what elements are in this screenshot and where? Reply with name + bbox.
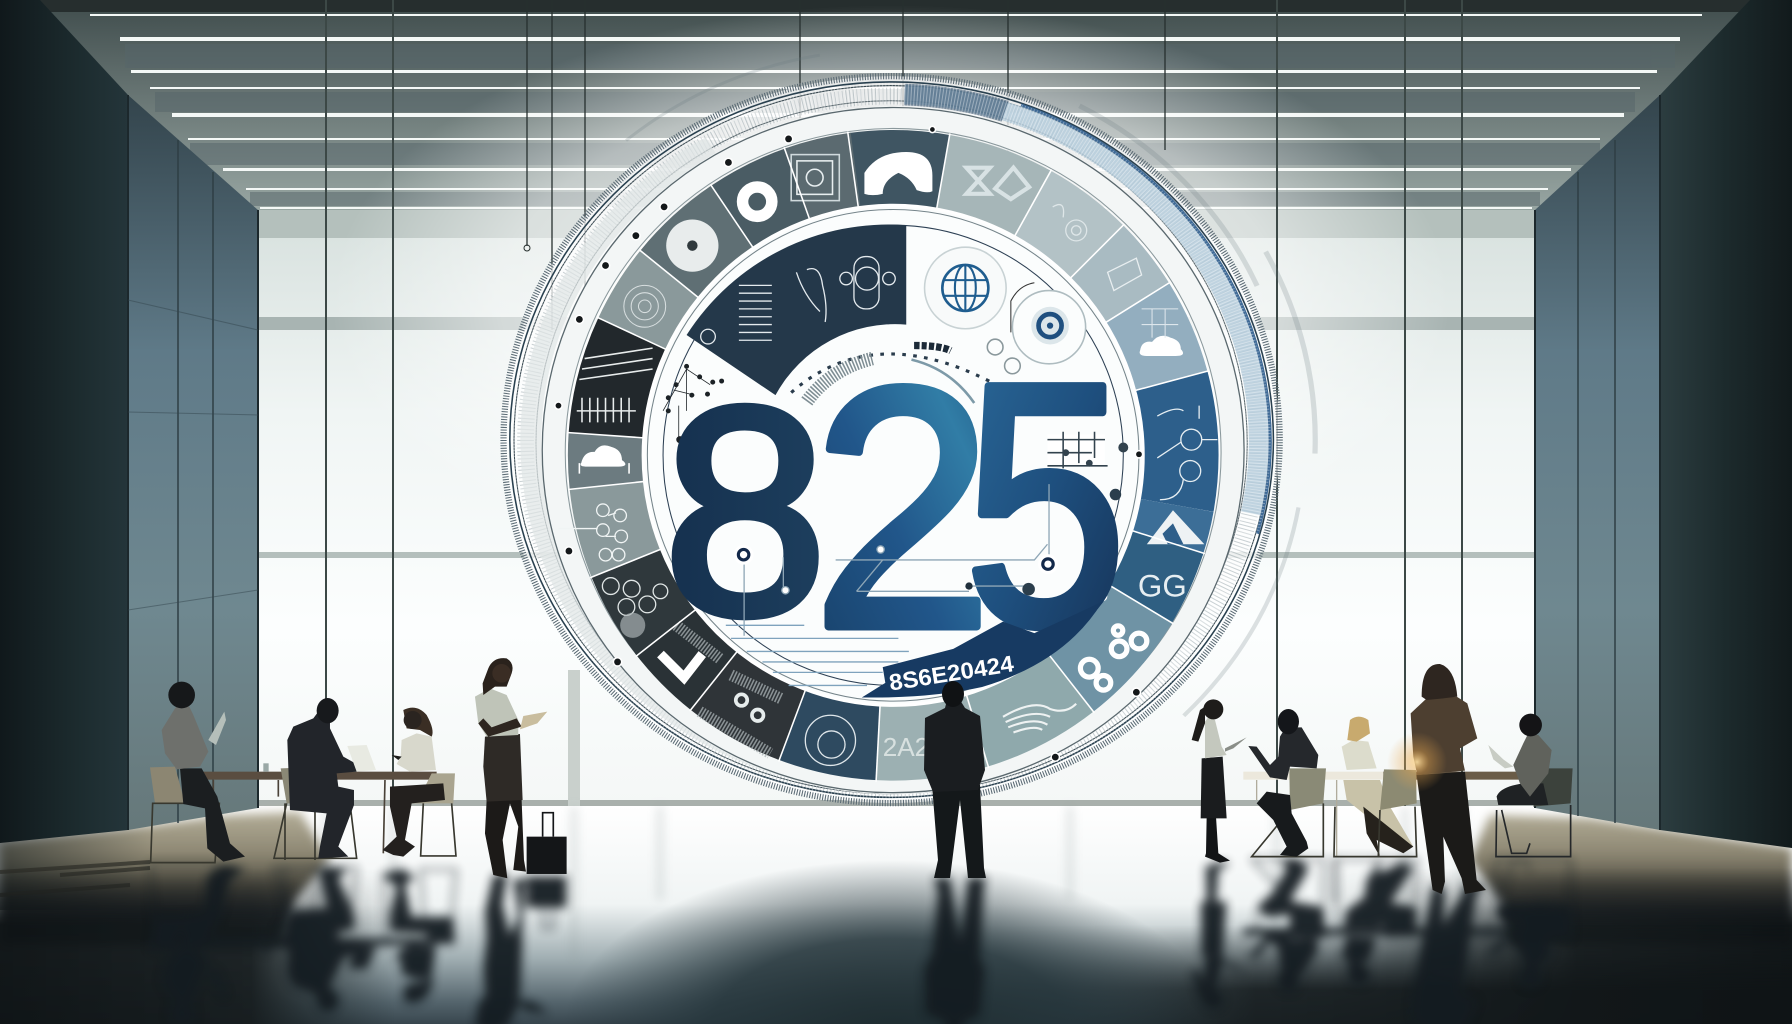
big number 825 <box>663 311 1127 699</box>
blonde seated woman <box>1342 717 1413 857</box>
icon: small ring <box>701 329 715 344</box>
icon: chip square <box>791 155 839 201</box>
icon: swirl <box>1053 205 1087 241</box>
back window <box>250 200 1550 810</box>
seated man in suit <box>274 698 376 860</box>
panel label: 2A2 AL <box>883 732 967 762</box>
icon: circle glyph <box>805 715 856 765</box>
seated woman <box>383 708 456 857</box>
icon: cloud left <box>579 446 629 474</box>
icon: dotted circles <box>736 694 763 721</box>
right wall <box>1535 0 1792 848</box>
lower lines and dark banner <box>726 602 1102 698</box>
meeting table <box>202 763 437 853</box>
panel divider lines <box>567 132 1209 782</box>
icon: target <box>987 283 1086 374</box>
icon: x shapes <box>966 168 1029 199</box>
standing woman with tablet and suitcase <box>475 658 567 878</box>
icon: badge <box>840 257 895 309</box>
center chair <box>1334 769 1417 857</box>
left wall <box>0 0 258 843</box>
sun flare beside standing woman <box>1387 732 1447 792</box>
icon: hexagons <box>602 578 668 638</box>
right: woman with ponytail <box>1192 699 1247 863</box>
icon: hook <box>796 269 826 322</box>
reflective floor <box>0 806 1792 1024</box>
band dots <box>555 126 1143 761</box>
dark sector of inner disc <box>687 225 906 395</box>
faint arcs of tiny marks outside the dial <box>310 0 1474 990</box>
outer disc and hatched rings <box>406 0 1377 900</box>
icon: fingerprint <box>624 285 666 327</box>
icon: phone <box>864 152 932 195</box>
center man seen from behind <box>924 681 986 878</box>
panel glyphs: GG <box>1138 569 1187 604</box>
icon: ring <box>743 187 772 216</box>
standing woman in suit <box>1411 664 1486 894</box>
seated person with tablet <box>1488 714 1573 857</box>
icon: check mark <box>660 654 702 678</box>
banner number: 8S6E20424 <box>887 650 1016 696</box>
icon: wave <box>1003 704 1076 733</box>
arc of dots above the digits <box>791 345 1012 403</box>
icon: triangle <box>1147 510 1204 544</box>
digit 2: 2 <box>812 317 993 699</box>
hanging thin lines and window mullions <box>326 0 1462 806</box>
icon: disc <box>666 219 718 272</box>
circuit overlay on the digits <box>734 484 1121 636</box>
light glow behind dial <box>331 5 1451 595</box>
dial: 825 circular infographic <box>310 0 1474 990</box>
icon: lines <box>739 285 772 340</box>
icon: chip <box>1108 258 1142 291</box>
left meeting group <box>150 682 456 863</box>
seated man with tablet <box>150 682 245 863</box>
dot texture patches <box>676 625 781 753</box>
meeting table <box>1243 772 1527 857</box>
ring of icon panels <box>487 50 1299 861</box>
reflections of people in the floor <box>150 859 1573 1024</box>
icon: globe <box>925 247 1006 329</box>
icon: suitcase <box>527 813 567 874</box>
icon: barcode <box>577 348 653 422</box>
inner dark sector icons <box>701 257 895 344</box>
inner white disc <box>643 205 1143 705</box>
panel icons <box>558 152 1217 765</box>
digit 5: 5 <box>964 311 1127 697</box>
icon: flower circles <box>1080 626 1147 690</box>
icon: circuit nodes <box>1157 406 1217 500</box>
left circuit cluster <box>663 364 724 443</box>
icon: nodes <box>558 504 627 561</box>
small circuit block on digit 5 <box>1047 432 1127 468</box>
right meeting group <box>1243 709 1573 857</box>
icon: cloud right <box>1140 309 1183 356</box>
seated man gesturing <box>1248 709 1326 857</box>
digit 8: 8 <box>663 346 827 676</box>
ceiling with light slats <box>30 0 1762 238</box>
